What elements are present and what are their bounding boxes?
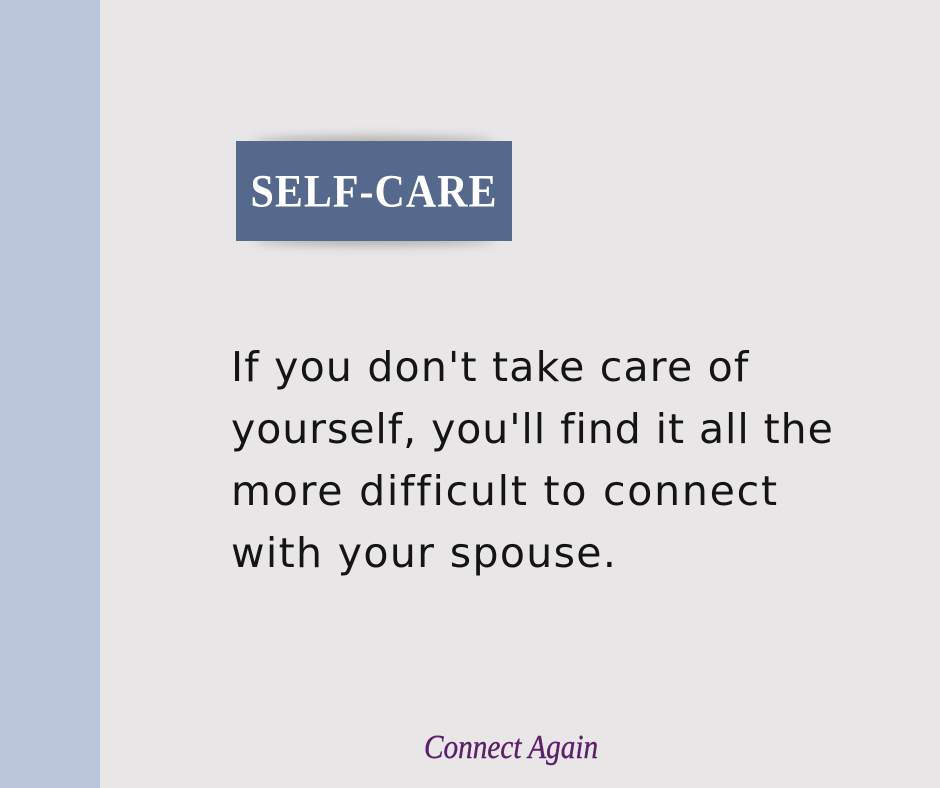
badge top shadow [254, 137, 494, 147]
badge bottom shadow [254, 235, 494, 245]
body text: yourself, you'll find it all the [231, 405, 834, 453]
badge rectangle [236, 141, 512, 241]
heading badge: SELF-CARE [236, 131, 512, 251]
footer brand: Connect Again: Connect Again [424, 729, 598, 766]
body text: If you don't take care of [231, 343, 750, 391]
body text: more difficult to connect [231, 467, 779, 515]
body text: with your spouse. [231, 529, 617, 577]
badge title: SELF-CARE [250, 166, 498, 218]
body text [231, 343, 834, 577]
sidebar stripe [0, 0, 100, 788]
